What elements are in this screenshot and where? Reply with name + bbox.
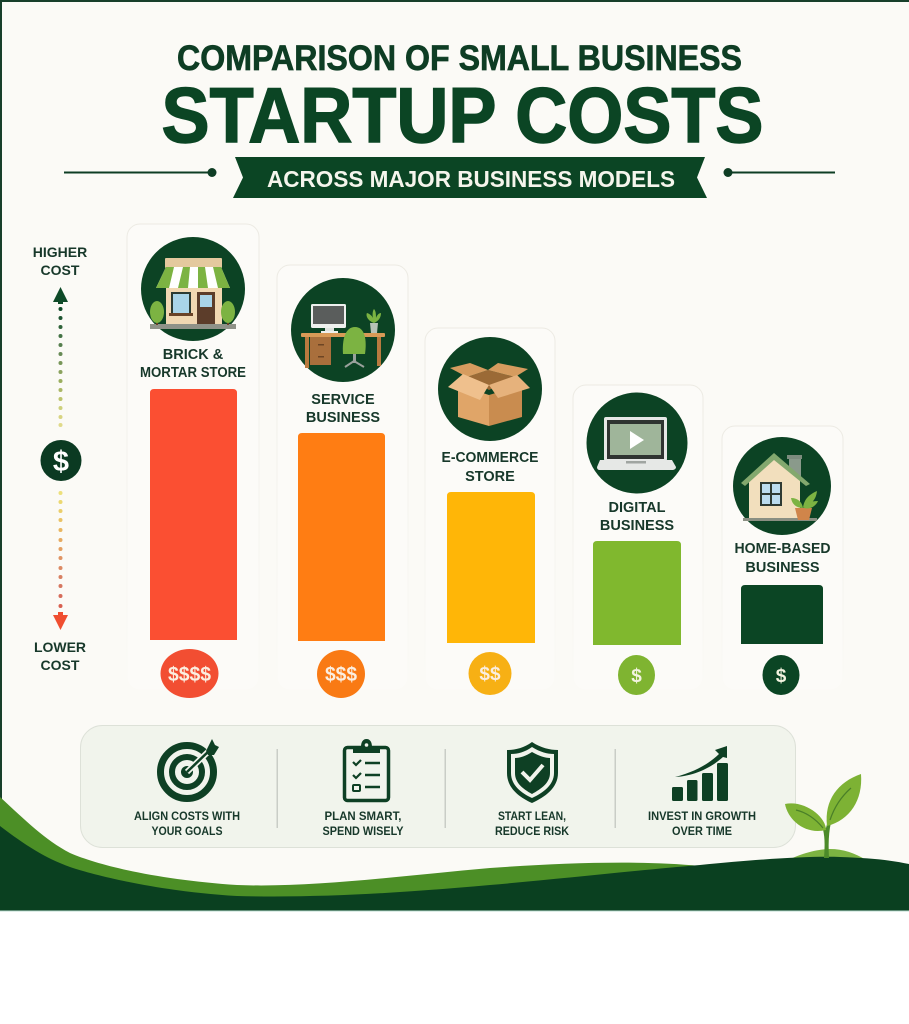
axis label: lower cost: LOWER <box>34 639 86 655</box>
text: OVER TIME <box>672 824 732 838</box>
text: START LEAN, <box>498 809 566 823</box>
tip: align costs <box>134 739 240 838</box>
icon: shield <box>507 742 558 803</box>
icon: cardboard box <box>438 337 542 441</box>
bar <box>741 585 823 644</box>
label: BUSINESS <box>745 560 820 576</box>
cost badge: $ <box>776 666 787 687</box>
title: startup costs: STARTUP COSTS <box>162 71 764 159</box>
arrow: up <box>53 287 68 304</box>
cost axis <box>33 244 87 673</box>
subtitle banner <box>233 157 707 198</box>
text <box>495 809 569 838</box>
text <box>322 809 404 838</box>
axis label: lower cost <box>34 639 86 673</box>
label <box>442 450 539 485</box>
card outline <box>722 426 843 690</box>
tip: invest in growth <box>648 746 756 838</box>
cost badge: $$$$ <box>168 664 211 686</box>
column: home-based business <box>722 426 843 695</box>
card outline <box>277 265 408 690</box>
cost badge <box>762 655 800 695</box>
icon: desk <box>291 278 395 382</box>
icon: storefront <box>141 237 245 341</box>
label: BUSINESS <box>306 410 380 426</box>
label: STORE <box>465 469 515 485</box>
dotted line: lower <box>58 491 62 608</box>
column: service business <box>277 265 408 698</box>
footer: dark green wave <box>0 826 909 910</box>
icon: dollar circle <box>40 440 82 481</box>
footer: bottom edge <box>0 910 909 912</box>
axis label: higher cost: HIGHER <box>33 244 87 260</box>
column: e-commerce store <box>425 328 555 695</box>
panel: tips <box>80 726 796 848</box>
cost badge: $ <box>631 666 642 687</box>
text: PLAN SMART, <box>324 809 402 823</box>
label: MORTAR STORE <box>140 365 246 381</box>
label: E-COMMERCE <box>442 450 539 466</box>
bar <box>593 541 681 645</box>
cost badge: $$$ <box>325 664 357 686</box>
text: ALIGN COSTS WITH <box>134 809 240 823</box>
label: BUSINESS <box>600 518 674 534</box>
card outline <box>127 224 259 690</box>
bar <box>298 433 385 641</box>
column: digital business <box>573 385 703 695</box>
column: brick and mortar store <box>127 224 259 698</box>
label <box>600 500 674 534</box>
card outline <box>573 385 703 690</box>
tip: start lean <box>495 742 569 838</box>
label <box>140 347 246 381</box>
icon: house <box>733 437 831 535</box>
left banner rule <box>64 168 216 177</box>
card outline <box>425 328 555 690</box>
cost badge <box>317 650 365 698</box>
subtitle banner: ACROSS MAJOR BUSINESS MODELS <box>267 166 675 192</box>
footer: light green wave <box>0 797 700 900</box>
footer: sprout mound <box>788 849 866 860</box>
arrow: down <box>53 612 68 630</box>
text: SPEND WISELY <box>322 824 404 838</box>
title: first line: COMPARISON OF SMALL BUSINESS <box>177 39 742 78</box>
label: HOME-BASED <box>734 541 830 557</box>
label <box>306 392 380 426</box>
axis label: lower cost: COST <box>41 657 80 673</box>
icon: laptop <box>586 392 688 494</box>
text: INVEST IN GROWTH <box>648 809 756 823</box>
label: SERVICE <box>311 392 375 408</box>
axis label: higher cost: COST <box>41 262 80 278</box>
bar <box>447 492 535 643</box>
icon: sprout <box>785 774 861 858</box>
text <box>134 809 240 838</box>
icon: clipboard <box>344 739 388 800</box>
text: YOUR GOALS <box>152 824 223 838</box>
tip: plan smart <box>322 739 404 838</box>
cost badge <box>618 655 655 695</box>
text: REDUCE RISK <box>495 824 569 838</box>
label: BRICK & <box>163 347 224 363</box>
cost badge <box>160 649 218 698</box>
bar <box>150 389 237 640</box>
label: DIGITAL <box>609 500 666 516</box>
icon: dollar circle: $ <box>53 446 69 478</box>
icon: growth chart <box>672 746 728 801</box>
right banner rule <box>724 168 835 177</box>
axis label: higher cost <box>33 244 87 278</box>
dotted line: upper <box>58 307 62 427</box>
icon: target <box>160 739 219 798</box>
text <box>648 809 756 838</box>
label <box>734 541 830 576</box>
cost badge: $$ <box>479 664 501 685</box>
cost badge <box>468 652 512 695</box>
